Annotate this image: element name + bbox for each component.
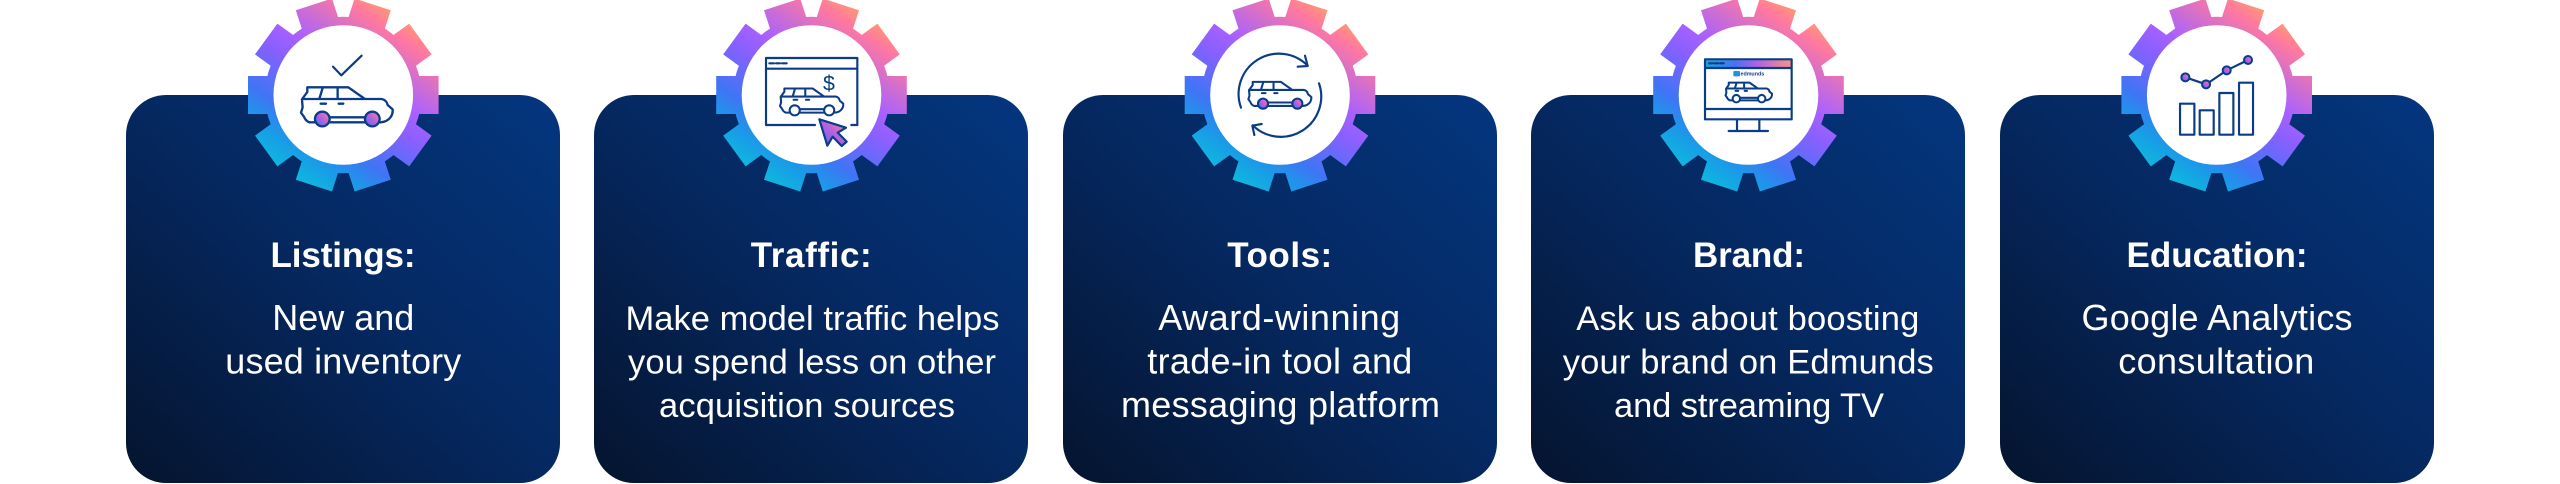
panel: traffic (594, 0, 1028, 483)
text: listings description: New and (272, 297, 414, 338)
icon: car with checkmark (301, 56, 393, 126)
text: education description: consultation (2118, 340, 2314, 382)
text: tools description: trade-in tool and (1147, 340, 1412, 382)
heading: brand: Brand: (1693, 236, 1805, 275)
icon: car with cycle arrows (1239, 54, 1321, 137)
text: traffic description (626, 300, 1000, 425)
heading: education: Education: (2126, 236, 2308, 275)
text: brand description: and streaming TV (1614, 387, 1884, 425)
card background (126, 95, 560, 483)
text: brand description (1563, 300, 1934, 425)
text: listings description (225, 297, 461, 382)
gear badge (1185, 0, 1375, 192)
text: brand description: Ask us about boosting (1576, 300, 1919, 338)
icon: monitor with car (1705, 59, 1792, 131)
panel: brand (1531, 0, 1965, 483)
text: tools description (1121, 297, 1440, 425)
heading: listings: Listings: (270, 236, 416, 275)
icon: browser window with car and cursor: $ (823, 72, 835, 96)
text: traffic description: you spend less on other (628, 344, 996, 382)
text: listings description: used inventory (225, 340, 461, 382)
text: tools description: Award-winning (1158, 297, 1400, 338)
card background (2000, 95, 2434, 483)
heading: traffic: Traffic: (751, 236, 872, 275)
panel: listings (126, 0, 560, 483)
card background (594, 95, 1028, 483)
text: traffic description: Make model traffic helps (626, 300, 1000, 338)
text: brand description: your brand on Edmunds (1563, 344, 1934, 382)
text: tools description: messaging platform (1121, 384, 1440, 425)
icon: monitor with car: edmunds (1740, 72, 1764, 78)
gear badge (1653, 0, 1844, 192)
heading: tools: Tools: (1227, 236, 1332, 275)
gear badge (2121, 0, 2312, 192)
text: traffic description: acquisition sources (659, 387, 955, 425)
gear badge (716, 0, 907, 192)
panel: education (2000, 0, 2434, 483)
gear badge (248, 0, 439, 192)
panel: tools (1063, 0, 1497, 483)
card background (1531, 95, 1965, 483)
text: education description (2082, 297, 2352, 382)
icon: browser window with car and cursor (766, 58, 857, 146)
text: education description: Google Analytics (2082, 297, 2352, 338)
icon: bar and line chart (2180, 56, 2253, 135)
card background (1063, 95, 1497, 483)
